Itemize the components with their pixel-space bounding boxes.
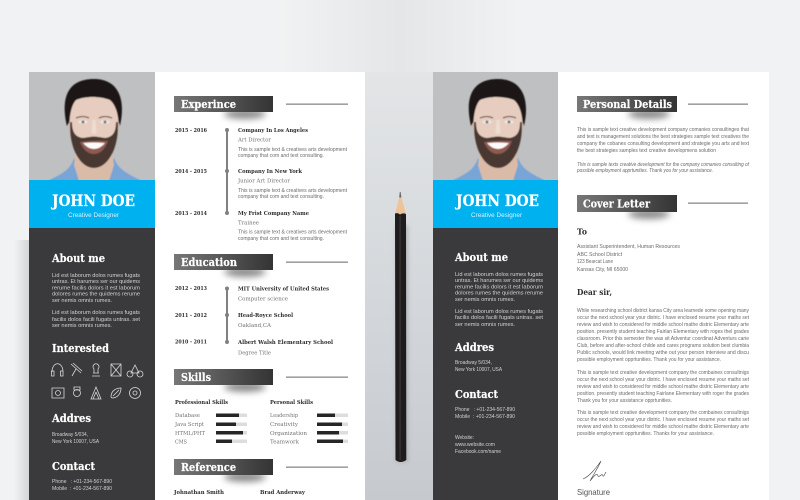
name banner: JOHN DOE	[454, 191, 539, 210]
portrait	[48, 79, 142, 181]
professional skills: CMS	[175, 440, 187, 446]
heading: about me: About me	[454, 250, 508, 264]
about me text	[52, 273, 141, 329]
letter paragraph 2: position. presently student teaching Fairlane Elementary with roger the grades	[577, 391, 749, 397]
entry: 2012: 2012 - 2013	[175, 286, 207, 292]
entry: 2013: company that com and text consulting.	[238, 236, 324, 242]
website text: www.website.com	[454, 442, 495, 448]
personal skills: Teamwork	[270, 440, 299, 446]
letter paragraph 1: Public schools, would link meeting withe out your person interview and discu	[577, 350, 749, 356]
entry: 2014: This is sample text & creatives arts development	[238, 188, 348, 194]
heading band: education: Education	[181, 255, 237, 269]
panel: education	[174, 254, 348, 356]
heading band: education	[174, 254, 348, 277]
letter paragraph 1: While researching school district kansa City area learnede some opening many	[577, 308, 749, 314]
heading: about me: About me	[51, 251, 105, 265]
panel: dark sidebar	[433, 228, 558, 500]
letter paragraph 1: review and wish to considered for middle school mathe distric Elementary arte	[577, 322, 749, 328]
skill bars: professional	[216, 414, 247, 443]
heading band: personal details	[577, 96, 748, 119]
entry: 2014	[175, 169, 348, 200]
professional skills	[174, 400, 247, 446]
icon: bicycle frame	[131, 365, 139, 373]
icon: headphones	[52, 364, 63, 376]
entry: 2014: company that com and text consulting.	[238, 194, 324, 200]
about me text: ser nemis omnis rumes.	[52, 323, 112, 329]
about me text: ser nemis omnis rumes.	[455, 297, 515, 303]
heading band: experience: Experince	[181, 97, 236, 111]
personal details text: the best strategies samples text creative developmens solution	[577, 148, 716, 154]
name banner: JOHN DOE	[50, 191, 135, 210]
heading band: cover letter	[577, 195, 748, 219]
heading band: skills: Skills	[181, 370, 211, 384]
icon: medal	[74, 387, 80, 397]
entry: 2013: 2013 - 2014	[175, 211, 207, 217]
panel: resume page	[29, 72, 365, 500]
letter paragraph 1: position. presently student teaching Fairlan Elementary with roges thel grades	[577, 329, 749, 335]
recipient: To	[577, 228, 587, 238]
contact text: Mobile : +01-234-567-890	[52, 486, 112, 492]
heading band: reference: Reference	[181, 460, 236, 474]
professional skills: Java Script	[174, 422, 205, 428]
entry: 2015: Art Director	[237, 138, 271, 144]
entry: 2013: Trainee	[238, 220, 260, 226]
entry: 2012	[175, 286, 329, 302]
entry: 2015: This is sample text & creatives arts development	[238, 147, 348, 153]
entry: 2015	[175, 128, 348, 159]
entry: 2015: 2015 - 2016	[175, 128, 207, 134]
letter paragraph 3: possible employment opprtunities. Thanks for your assistance.	[577, 431, 714, 437]
letter paragraph 2	[577, 370, 750, 404]
recipient	[577, 228, 680, 273]
contact text: Phone : +01-234-567-890	[52, 479, 112, 485]
icons: interests	[52, 363, 143, 399]
heading: address: Addres	[51, 411, 91, 425]
entry: 2010: Albert Walsh Elementary School	[237, 340, 333, 346]
name banner: Creative Designer	[471, 212, 523, 219]
name banner	[433, 180, 558, 228]
entry: 2012: Computer science	[238, 296, 289, 302]
personal skills	[270, 400, 348, 446]
about me text: ser nemis omnis rumes.	[455, 322, 515, 328]
about me text: dolores rumes the quidems rerume	[455, 290, 543, 296]
name banner: Creative Designer	[68, 212, 120, 219]
entry: 2013	[175, 211, 348, 242]
entry: 2014: Company In New York	[238, 169, 302, 175]
timeline	[225, 128, 229, 215]
professional skills: Database	[175, 413, 201, 419]
heading: address: Addres	[454, 340, 494, 354]
entry: 2015: company that com and text consulting.	[238, 153, 324, 159]
background shading	[14, 0, 520, 500]
letter paragraph 2: occur the next school year your distric. I have enclosed resume your maths set	[577, 377, 750, 383]
heading band: reference	[174, 459, 348, 482]
contact text: Phone : +01-234-567-890	[455, 407, 515, 413]
entry: 2010	[175, 340, 333, 356]
address text	[455, 360, 502, 373]
recipient: Assistant Superintendent, Human Resources	[577, 244, 680, 250]
professional skills: HTML/PHT	[175, 431, 205, 437]
icon: bicycle wheels	[127, 371, 143, 377]
letter paragraph 3: This is sample text creative development company the combaines consultnigs	[577, 410, 749, 416]
panel: cover letter	[577, 195, 750, 497]
recipient: 123 Bearcat Lane	[577, 259, 613, 265]
about me text: untras. Et harumes ser our quidems	[52, 279, 140, 285]
icon: target	[130, 388, 140, 398]
entry: 2011	[175, 313, 293, 329]
name banner	[29, 180, 155, 228]
personal skills: Organization	[270, 431, 307, 437]
personal skills: Creativity	[270, 422, 299, 428]
icon: chess piece	[92, 364, 100, 376]
timeline	[225, 286, 229, 344]
contact text: Mobile : +01-234-567-890	[455, 414, 515, 420]
heading band: cover letter: Cover Letter	[583, 196, 651, 210]
about me text: facilis dolos facili fugats untras. set	[52, 317, 141, 323]
contact text	[52, 479, 112, 492]
panel: experience	[174, 96, 348, 242]
about me text: dolores rumes the quidems rerume	[52, 292, 140, 298]
letter paragraph 3: occur the next school year your distric. I have enclosed resume your maths set	[577, 417, 750, 423]
panel: skills	[174, 369, 348, 446]
icon: football	[111, 388, 121, 398]
panel: reference	[173, 459, 348, 496]
heading: contact: Contact	[455, 387, 499, 401]
entry: 2013: This is sample text & creatives arts development	[238, 230, 348, 236]
letter paragraph 2: Thank you for your assistance opprtunities.	[577, 398, 672, 404]
address text	[52, 432, 99, 445]
heading: interested: Interested	[52, 341, 109, 355]
entry: 2012: MIT University of United States	[238, 286, 329, 292]
personal details text: This is sample text creative development company comanies consultinges that	[577, 127, 750, 133]
icon: pencil	[395, 192, 408, 462]
icon: telescope	[71, 363, 82, 376]
icon: camera	[52, 388, 64, 398]
portrait	[452, 79, 546, 181]
letter paragraph 3	[577, 410, 750, 437]
entry: 2011: Oakland,CA	[238, 323, 272, 329]
heading band: personal details: Personal Details	[583, 97, 672, 111]
address text: Broadway 5/034,	[455, 360, 492, 366]
entry: 2013: My Frist Company Name	[238, 211, 309, 217]
reference names: Brad Anderway	[260, 490, 306, 496]
personal skills: Leadership	[270, 413, 298, 419]
entry: 2014: Junior Art Director	[237, 178, 290, 184]
about me text: ser nemis omnis rumes.	[52, 298, 112, 304]
entry: 2014: 2014 - 2015	[175, 169, 207, 175]
reference names: Johnathan Smith	[173, 490, 224, 496]
contact text	[455, 407, 515, 420]
about me text: Lid est laborum dolos rumes fugats	[52, 310, 140, 316]
website text: Facebook.com/name	[455, 449, 501, 455]
address text: New York 10007, USA	[455, 367, 502, 373]
about me text: Lid est laborum dolos rumes fugats	[455, 309, 543, 315]
entry: 2010: 2010 - 2011	[175, 340, 207, 346]
icon: map	[111, 364, 121, 376]
panel: cover letter page	[433, 72, 769, 500]
entry: 2015: Company In Los Angeles	[238, 128, 308, 134]
personal details text: company the cobanes consulting development and strategie you arts and text	[577, 141, 750, 147]
photo panel	[29, 72, 155, 180]
letter paragraph 1: possible employment opprtunities. Thank you for your assistance.	[577, 357, 721, 363]
address text: New York 10007, USA	[52, 439, 99, 445]
website text	[454, 435, 501, 455]
salutation: Dear sir,	[577, 288, 612, 298]
entry: 2011: Head-Royce School	[238, 313, 293, 319]
panel: dark sidebar	[29, 228, 155, 500]
letter paragraph 1: classroom. Prior this semester the was sit Adventur coordinat Adventurs carie	[577, 336, 749, 342]
letter paragraph 3: review and wish to considered for middle school mathe distric Elementary arte	[577, 424, 749, 430]
letter paragraph 1	[577, 308, 750, 363]
about me text: rerume facilis dolors it est laborum	[455, 284, 544, 290]
personal details text: possible employment apprtunities. Thank you for your assistance.	[576, 168, 713, 174]
signature label: Signature	[577, 487, 610, 497]
skill bars: personal	[317, 414, 348, 443]
reference names	[173, 490, 306, 496]
about me text	[455, 272, 544, 328]
heading: contact: Contact	[52, 459, 96, 473]
icon: handwritten signature	[583, 461, 606, 481]
photo panel	[433, 72, 558, 180]
about me text: Lid est laborum dolos rumes fugats	[52, 273, 140, 279]
personal details text: This is sample texts creative development for the company comanies consulting of	[577, 162, 749, 168]
entry: 2011: 2011 - 2012	[175, 313, 207, 319]
professional skills: Professional Skills	[175, 400, 228, 406]
about me text: facilis dolos facili fugats untras. set	[455, 315, 544, 321]
personal details text	[576, 127, 750, 174]
about me text: untras. Et harumes ser our quidems	[455, 278, 543, 284]
letter paragraph 1: occur the next school year your distric. I have enclosed resume your maths set	[577, 315, 750, 321]
personal skills: Personal Skills	[270, 400, 313, 406]
personal details text: and text is management solutions the best strategies sample text creatives the	[577, 134, 749, 140]
panel: personal details	[576, 96, 750, 174]
letter paragraph 2: review and wish to considered for middle school mathe distric Elementary arte	[577, 384, 749, 390]
letter paragraph 2: This is sample text creative development company the combaines consultnigs	[577, 370, 749, 376]
recipient: ABC School District	[577, 252, 622, 258]
about me text: Lid est laborum dolos rumes fugats	[455, 272, 543, 278]
recipient: Kansas City, MI 65000	[577, 267, 628, 273]
heading band: skills	[174, 369, 348, 392]
icon: tent	[91, 387, 101, 399]
address text: Broadway 5/034,	[52, 432, 88, 438]
letter paragraph 1: Club, before and after-school childe and cares programs solution best clumbia	[577, 343, 749, 349]
heading band: experience	[174, 96, 348, 119]
entry: 2010: Degree Title	[238, 350, 272, 356]
website text: Website:	[455, 435, 474, 441]
about me text: rerume facilis dolors it est laborum	[52, 286, 141, 292]
